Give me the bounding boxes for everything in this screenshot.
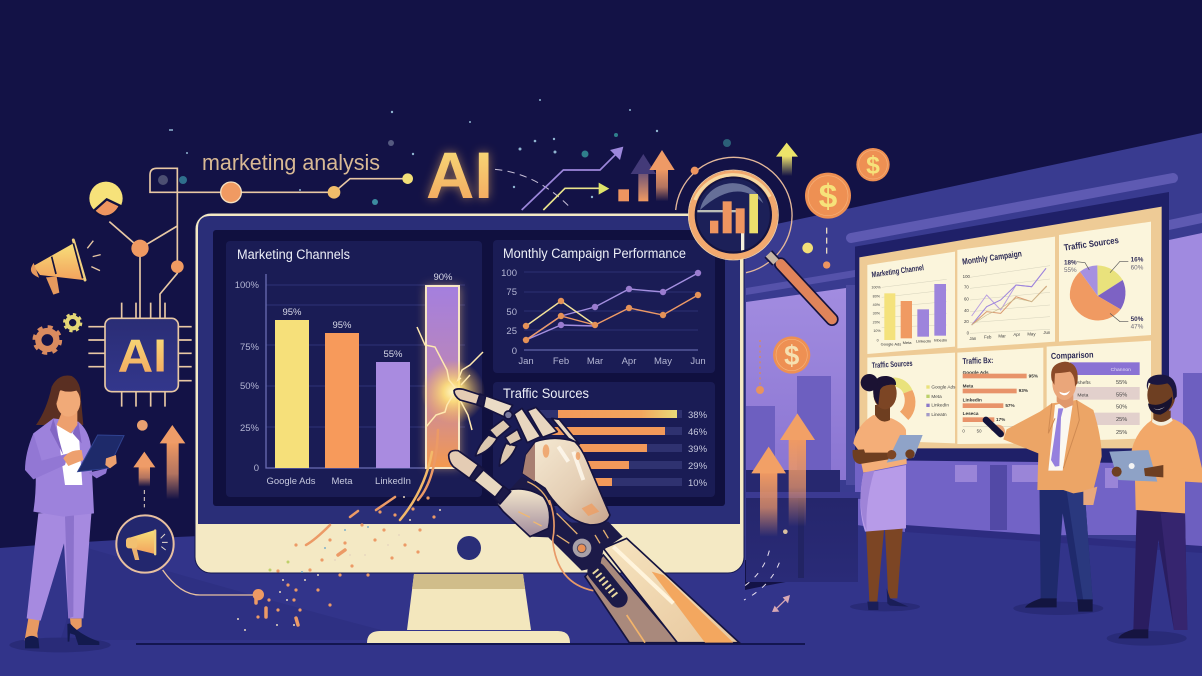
monitor stand: [367, 574, 570, 643]
icon: dollar coin mid: $: [784, 340, 799, 371]
bars: [275, 320, 410, 468]
screen panel: monthly campaign: Apr: [1013, 332, 1021, 337]
person: woman with tablet: [9, 376, 124, 652]
right screen: [855, 192, 1169, 463]
axes and gridlines: [266, 274, 465, 468]
icon: megaphone badge: [116, 515, 174, 573]
person: presenter man: [986, 362, 1103, 615]
screen panel: comparison table: 55%: [1116, 380, 1127, 386]
screen panel: traffic sources pie: 60%: [1131, 264, 1144, 271]
circuit network left: [32, 168, 413, 407]
lightning spark: [417, 327, 485, 430]
screen panel: traffic bars: LinkedIn: [963, 397, 982, 402]
category labels: LinkedIn: [375, 476, 411, 487]
screen panel: traffic sources pie: 55%: [1064, 267, 1077, 274]
screen panel: traffic bars: 57%: [1005, 403, 1016, 408]
line chart axis labels: [501, 268, 706, 367]
line chart axis labels: Jan: [518, 356, 534, 367]
screen panel: traffic sources pie: 16%: [1131, 256, 1144, 263]
screen panel: traffic bars: 60: [1017, 429, 1022, 434]
connector dots: [802, 228, 830, 269]
screen panel: traffic bars: Meta: [963, 384, 974, 389]
screen panel: monthly campaign: [957, 237, 1055, 348]
screen panel: traffic bars: 0: [962, 429, 965, 434]
screen panel: monthly campaign: Jan: [969, 336, 977, 341]
screen panel: traffic sources donut: Google Ads: [931, 385, 956, 390]
screen panel: comparison table: Comparison: [1051, 350, 1094, 361]
screen panel: comparison table: shefts: [1077, 380, 1091, 386]
wrist: [497, 477, 623, 571]
floor line: [136, 643, 805, 645]
icon: megaphone: [32, 240, 101, 295]
magnifier ring arc: [676, 157, 792, 273]
screen panel: traffic sources pie: 47%: [1131, 323, 1144, 330]
screen panel: monthly campaign: 0: [967, 331, 970, 336]
screen panel: traffic sources pie: 50%: [1131, 316, 1144, 323]
icon: large gear: [34, 327, 60, 353]
line markers: [523, 270, 701, 343]
screen panel: monthly campaign: 20: [964, 319, 969, 324]
chip connector and small icon left: [9, 376, 264, 652]
power button: [457, 536, 481, 560]
screen panel: comparison table: Meta: [1077, 392, 1089, 398]
screen panel: traffic sources donut: Meta: [931, 394, 942, 399]
panel: marketing channels: [226, 241, 482, 497]
nodes: [131, 173, 413, 273]
cabinet desk: [746, 470, 862, 582]
bar and up arrows: [618, 150, 675, 201]
starfield dots: [158, 99, 731, 205]
screen panel: monthly campaign: 60: [964, 296, 969, 301]
mid-right coin and arrows: [743, 336, 815, 612]
percent labels: [688, 410, 708, 489]
arrow: yellow up: [776, 143, 798, 176]
line chart axis labels: Apr: [622, 356, 636, 367]
screen panel: marketing channel: 30%: [873, 312, 881, 316]
value labels: 95%: [332, 320, 352, 331]
line series: [526, 273, 698, 340]
floor: [0, 525, 1202, 676]
screen panel: comparison table: 50%: [1116, 405, 1127, 411]
icon: AI chip: AI: [118, 330, 167, 382]
screen panel: monthly campaign: Monthly Campaign: [962, 248, 1022, 267]
spark particles: [238, 430, 440, 630]
screen panel: comparison table: 25%: [1116, 430, 1127, 436]
screen panel: marketing channel: 40%: [873, 303, 881, 307]
percent labels: 39%: [688, 444, 708, 455]
screen panel: marketing channel: Inbedin: [934, 337, 947, 342]
screen panel: marketing channel: 100%: [871, 286, 881, 290]
screen panel: traffic sources donut: [867, 353, 956, 443]
line chart axis labels: 25: [506, 326, 517, 337]
screen panel: comparison table: [1047, 341, 1151, 442]
screen panel: monthly campaign: May: [1027, 331, 1036, 336]
glowing bar: [426, 286, 460, 468]
percent labels: 46%: [688, 427, 708, 438]
screen panel: traffic bars: 50: [977, 429, 982, 434]
palm: [523, 438, 610, 525]
y axis labels: 100%: [235, 280, 260, 291]
line chart axis labels: 0: [512, 346, 517, 357]
screen panel: comparison table: Channon: [1111, 367, 1131, 373]
screen panel: traffic sources donut: Traffic Sources: [872, 359, 913, 370]
title: monthly campaign: Monthly Campaign Performance: [503, 246, 686, 261]
arrow: purple growth: [522, 147, 623, 210]
screen panel: traffic sources donut: Lineatn: [931, 412, 947, 417]
icon: small dollar coin: [856, 148, 890, 181]
value labels: 90%: [433, 272, 453, 283]
line chart axis labels: May: [654, 356, 672, 367]
forearm: [585, 538, 739, 643]
category labels: [266, 476, 411, 487]
screen panel: monthly campaign: 40: [964, 308, 969, 313]
percent labels: 10%: [688, 478, 708, 489]
screen panel: marketing channel: 20%: [873, 320, 881, 324]
line chart axis labels: 50: [506, 307, 517, 318]
percent labels: 29%: [688, 461, 708, 472]
screen panel: marketing channel: Marketing Channel: [871, 263, 924, 279]
knuckle fingers: [514, 407, 579, 444]
line chart grid: [524, 272, 698, 350]
y axis labels: 25%: [240, 423, 260, 434]
robot hand: [449, 389, 623, 591]
value labels: [282, 272, 453, 360]
dotted vertical connector: [758, 340, 762, 387]
value labels: 55%: [383, 349, 403, 360]
icon: dollar coin mid: [773, 336, 810, 374]
screen panel: marketing channel: 80%: [873, 294, 881, 298]
screen panel: traffic bars: Leseca: [963, 411, 979, 416]
person: presenter woman right group: [850, 374, 923, 611]
thumb: [449, 450, 550, 537]
heading: AI glow: AI: [426, 138, 493, 212]
title: traffic sources: Traffic Sources: [503, 386, 589, 401]
percent labels: 38%: [688, 410, 708, 421]
title: marketing channels: Marketing Channels: [237, 247, 350, 262]
person: man with tablet: [1107, 375, 1202, 646]
panel: monthly campaign performance: [493, 240, 715, 373]
monitor: [195, 213, 744, 573]
icon: pie chart: [89, 182, 123, 217]
y axis labels: 0: [254, 463, 259, 474]
screen panel: monthly campaign: Jun: [1043, 330, 1051, 335]
icon: double arrow: [772, 595, 790, 612]
screen panel: marketing channel: Meta: [903, 340, 912, 345]
category labels: Google Ads: [266, 476, 316, 487]
wrist joint: [570, 536, 594, 560]
screen panel: traffic bars: 93%: [1019, 388, 1029, 393]
index finger: [454, 389, 513, 419]
screen panel: traffic sources pie: 18%: [1064, 260, 1077, 267]
screen panel: traffic bars: Google Ads: [963, 370, 989, 375]
arrow: yellow growth: [543, 183, 609, 210]
screen panel: traffic bars: 17%: [996, 417, 1006, 422]
icon: small gear: [64, 314, 81, 331]
panel: traffic sources: [493, 382, 715, 497]
connector to node: [163, 570, 258, 595]
dashed trails: [743, 551, 779, 600]
line chart axis labels: 100: [501, 268, 517, 279]
screen panel: monthly campaign: Feb: [984, 335, 992, 340]
line chart axis labels: Mar: [587, 356, 603, 367]
value labels: 95%: [282, 307, 302, 318]
top arrows and magnifier group: [495, 143, 890, 319]
screen panel: monthly campaign: 100: [963, 274, 970, 279]
y axis labels: 50%: [240, 381, 260, 392]
line chart axis labels: Feb: [553, 356, 569, 367]
arrow: up tall: [780, 413, 815, 527]
screen panel: monthly campaign: Mar: [998, 333, 1006, 338]
screen panel: marketing channel: 0: [877, 338, 879, 342]
screen panel: comparison table: 55%: [1116, 392, 1127, 398]
screen panel: traffic bars: 95%: [1029, 373, 1039, 378]
screen panel: monthly campaign: 70: [964, 285, 969, 290]
robot arm: [585, 538, 739, 643]
icon: magnifying glass: [688, 170, 832, 319]
screen panel: traffic sources pie: [1059, 222, 1151, 342]
screen panel: comparison table: 25%: [1116, 417, 1127, 423]
arrow: up small left: [133, 452, 155, 487]
arrow: up short: [751, 447, 786, 537]
icon: small dollar coin: $: [866, 152, 880, 179]
icon: AI chip: [88, 303, 192, 407]
screen panel: traffic sources donut: LinkedIn: [931, 403, 949, 408]
category labels: Meta: [331, 476, 353, 487]
screen panel: traffic bars: Traffic Bx:: [962, 355, 993, 366]
line chart axis labels: Jun: [690, 356, 706, 367]
horizontal bars: [540, 410, 682, 486]
screen panel: marketing channel: Google Ads: [881, 341, 901, 346]
cable: [549, 500, 593, 591]
dashed arc: [495, 169, 570, 207]
arrow: up tall left: [160, 425, 185, 499]
heading: AI glow: AI: [426, 138, 493, 212]
room: wall and ceiling: [744, 133, 1202, 560]
curled fingers: [475, 419, 522, 466]
screen panel: marketing channel: 10%: [873, 329, 881, 333]
y axis labels: 75%: [240, 342, 260, 353]
line chart axis labels: 75: [506, 287, 517, 298]
icon: large dollar coin: $: [819, 178, 838, 215]
y axis labels: [235, 280, 260, 474]
screen panel: marketing channel: LinkedIn: [916, 339, 931, 344]
icon: large dollar coin: [805, 173, 851, 219]
screen panel: marketing channel: [867, 252, 955, 354]
heading: marketing analysis: marketing analysis: [202, 150, 380, 175]
screen panel: traffic bars: [957, 348, 1043, 444]
screen panel: traffic sources pie: Traffic Sources: [1063, 235, 1119, 253]
